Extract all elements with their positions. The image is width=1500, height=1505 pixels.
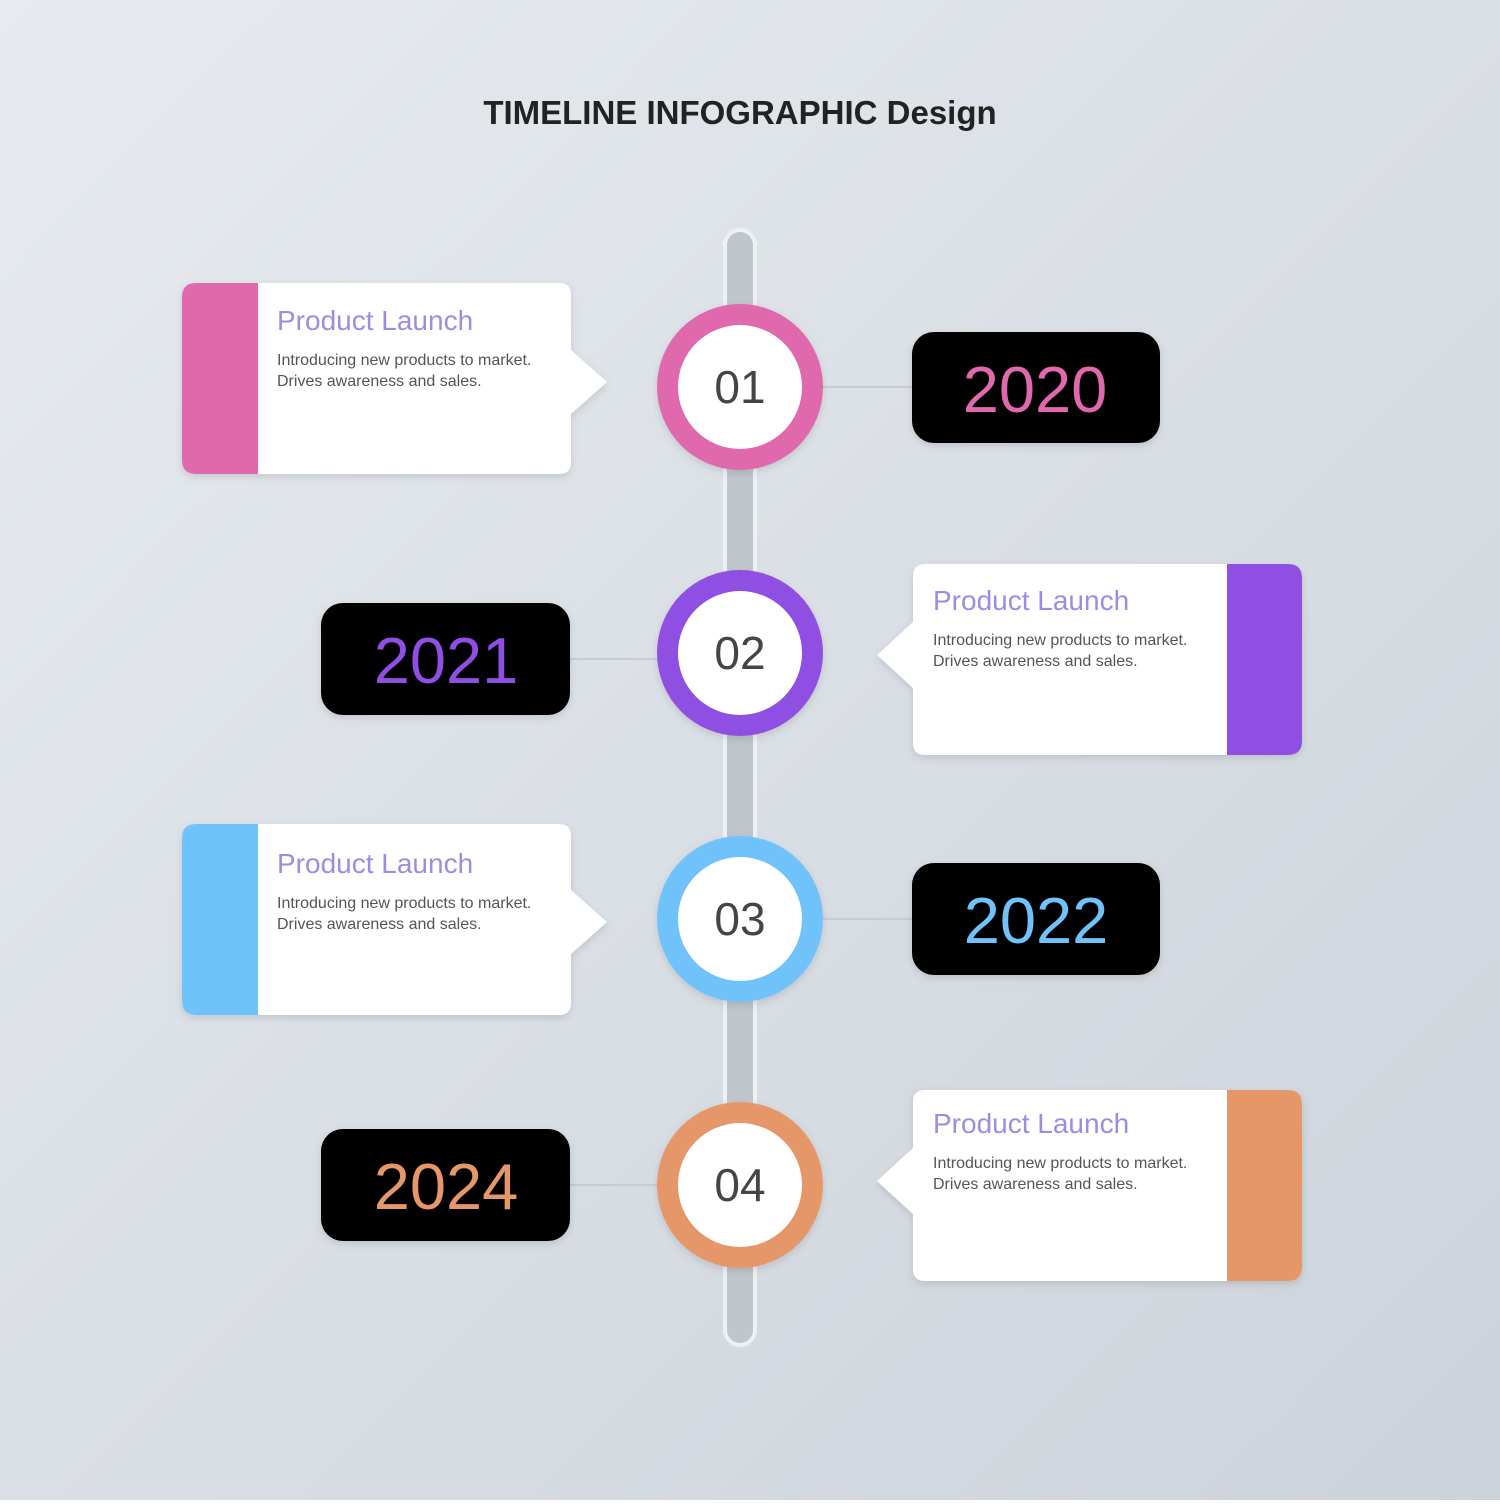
- card 02: [877, 564, 1302, 755]
- milestone 01 circle: [657, 304, 823, 470]
- year box 2022: 2022: [964, 884, 1108, 957]
- card 04: Drives awareness and sales.: [933, 1176, 1138, 1193]
- year box 2021: 2021: [374, 624, 518, 697]
- timeline track: [723, 228, 757, 1347]
- year box 2020: 2020: [963, 353, 1107, 426]
- card 01: [182, 283, 607, 474]
- card 03: [182, 824, 607, 1015]
- card 03: Introducing new products to market.: [277, 895, 531, 912]
- card 04: Product Launch: [933, 1108, 1129, 1139]
- year box 2024: [321, 1129, 570, 1241]
- milestone 02 circle: 02: [714, 627, 766, 679]
- milestone 01 circle: 01: [714, 361, 766, 413]
- milestone 02 circle: [657, 570, 823, 736]
- year box 2024: 2024: [374, 1150, 518, 1223]
- card 01: Introducing new products to market.: [277, 352, 531, 369]
- year box 2020: [912, 332, 1160, 443]
- connector lines: [570, 387, 912, 1185]
- card 02: Product Launch: [933, 585, 1129, 616]
- year box 2022: [912, 863, 1160, 975]
- card 01: Drives awareness and sales.: [277, 373, 482, 390]
- milestone 04 circle: [657, 1102, 823, 1268]
- milestone 04 circle: 04: [714, 1159, 766, 1211]
- card 02: Introducing new products to market.: [933, 632, 1187, 649]
- milestone 03 circle: [657, 836, 823, 1002]
- card 02: Drives awareness and sales.: [933, 653, 1138, 670]
- card 03: Drives awareness and sales.: [277, 916, 482, 933]
- card 04: Introducing new products to market.: [933, 1155, 1187, 1172]
- title: TIMELINE INFOGRAPHIC Design: [483, 94, 997, 131]
- card 04: [877, 1090, 1302, 1281]
- year box 2021: [321, 603, 570, 715]
- card 01: Product Launch: [277, 305, 473, 336]
- milestone 03 circle: 03: [714, 893, 766, 945]
- card 03: Product Launch: [277, 848, 473, 879]
